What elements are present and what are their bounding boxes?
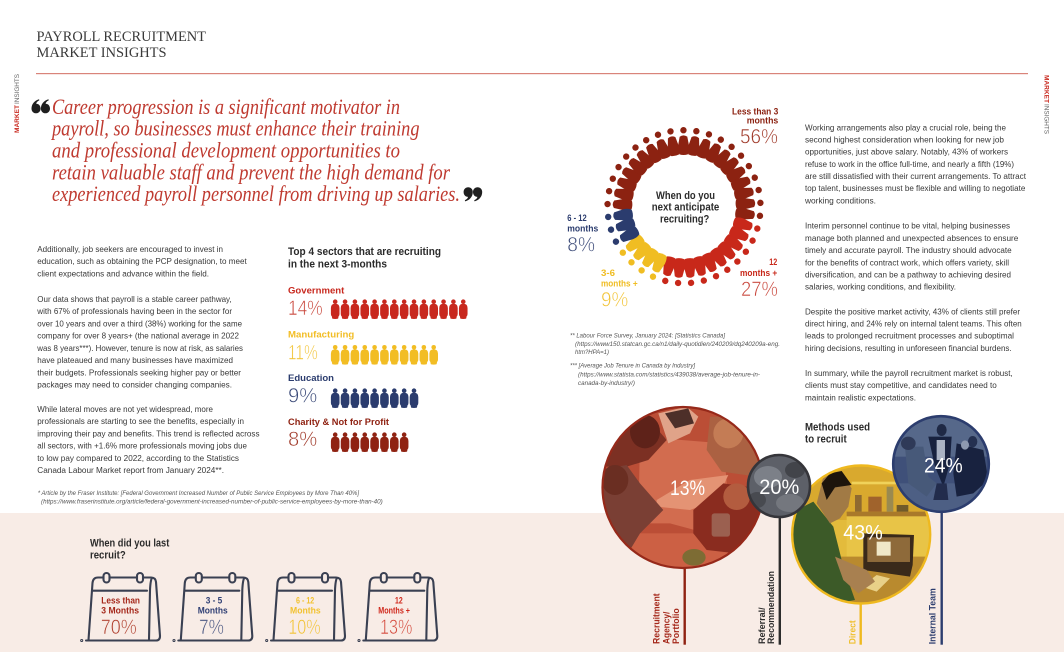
label: less than 3 months 56%: Less than 3 (732, 106, 778, 117)
footnotes: statistics sources (570, 332, 780, 387)
text block: left column: professionals are starting to see the benefits, especially in (37, 416, 244, 426)
label: 6-12 months 8%: 8% (567, 234, 595, 257)
vertical label: recruitment agency portfolio: Portfolio (671, 608, 681, 644)
pull quote: retain valuable staff and prevent the high demand for (52, 159, 450, 184)
pull quote (32, 94, 482, 206)
text block: right column: Despite the positive market activity, 43% of clients still prefer (805, 306, 1020, 316)
calendar: 3-5 months 7%: 7% (199, 616, 224, 639)
text block: right column: for the benefits of contract work, which offers variety, skill (805, 257, 1009, 267)
side label left: INSIGHTS (14, 74, 21, 104)
vertical label: referral recommendation (757, 571, 776, 644)
row: Charity and Not for Profit 8%: Charity & Not for Profit (288, 417, 390, 428)
pull quote: and professional development opportunities to (52, 137, 400, 162)
text block: left column: have plateaued and many businesses have maximized (37, 355, 233, 365)
vertical label: recruitment agency portfolio (651, 593, 681, 644)
text block: right column: direct hiring, and 24% rely on internal talent teams. This often (805, 318, 1022, 328)
calendar: less than 3 months 70%: 70% (101, 616, 137, 639)
photo circle: grey referral image (748, 454, 810, 518)
calendar: 12 months plus 13%: 13% (380, 616, 412, 639)
row: Education 9%: 9% (288, 385, 317, 408)
method: direct 43% (790, 463, 933, 645)
icon: opening quote mark (32, 99, 50, 113)
ring centre question: When do you (656, 190, 715, 202)
text block: right column: timely and accurate payroll. The industry should advocate (805, 245, 1012, 255)
label: 3-6 months plus 9%: months + (601, 279, 638, 290)
calendar: 3-5 months 7% (174, 573, 252, 641)
text block: right column (804, 122, 1027, 402)
label: 12 months plus 27%: 27% (741, 278, 778, 301)
row: Government 14%: 14% (288, 297, 323, 320)
side label left: MARKET (14, 105, 21, 133)
text block: right column: top talent, businesses must be flexible and willing to negotiate (805, 183, 1026, 193)
label: 12 months plus 27% (740, 257, 778, 301)
text block: left column: all sectors, with +1.6% more professionals moving jobs due (37, 441, 247, 451)
text block: right column: In summary, while the payroll recruitment market is robust, (805, 368, 1013, 378)
row: Manufacturing 11%: Manufacturing (288, 330, 354, 341)
footnotes: statistics sources: canada-by-industry/) (578, 380, 635, 387)
label: 6-12 months 8%: 6 - 12 (567, 213, 587, 224)
method: referral 20% (748, 454, 810, 645)
pull quote: experienced payroll personnel from driving up salaries. (52, 181, 460, 206)
label: less than 3 months 56%: 56% (740, 125, 778, 148)
ring centre question (652, 190, 719, 225)
text block: right column: working conditions. (804, 195, 876, 205)
text block: right column: Interim personnel continue to be vital, helping businesses (805, 221, 1010, 231)
calendar: 6-12 months 10%: Months (290, 606, 321, 617)
calendar: 3-5 months 7%: 3 - 5 (206, 595, 223, 606)
text block: left column: with 67% of professionals having been in the sector for (36, 306, 232, 316)
heading: top 4 sectors (288, 246, 441, 270)
method: recruitment agency 13% (600, 406, 767, 645)
heading: top 4 sectors: in the next 3-months (288, 258, 387, 270)
footnote: Fraser Institute: (https://www.fraserinstitute.org/article/federal-government-increased-number-of-public-service-employees-by-more-than-40) (41, 498, 383, 505)
label: 6-12 months 8% (567, 213, 598, 257)
text block: left column: was 8 years***). However, tenure is now at risk, as salaries (36, 343, 243, 353)
row: Manufacturing 11% (288, 330, 438, 365)
label: less than 3 months 56%: months (747, 115, 778, 126)
ring centre question: next anticipate (652, 202, 719, 214)
row: Charity and Not for Profit 8% (288, 417, 408, 452)
footnote: Fraser Institute: * Article by the Fraser Institute: [Federal Government Increased Number of Public Service Employees by More Than 40%] (38, 490, 359, 497)
heading: when did you last recruit: recruit? (90, 550, 126, 562)
text block: left column: company for over 8 years+ (the national average in 2022 (37, 331, 239, 341)
heading: methods used to recruit: to recruit (805, 434, 847, 446)
text block: left column: to low pay compared to 2022, according to the Statistics (37, 453, 239, 463)
vertical label: recruitment agency portfolio: Agency/ (662, 611, 672, 644)
ring segment: 3-6 months plus (617, 233, 668, 282)
row: Manufacturing 11%: 11% (288, 341, 318, 364)
row: Education 9%: Education (288, 373, 334, 384)
text block: right column: hiring decisions, resulting in unforeseen financial burdens. (805, 343, 1012, 353)
title: PAYROLL RECRUITMENT (36, 29, 206, 45)
label: 6-12 months 8%: months (567, 224, 598, 235)
percentage: 20% (759, 476, 799, 499)
text block: left column: Our data shows that payroll is a stable career pathway, (37, 294, 232, 304)
calendar: 6-12 months 10%: 6 - 12 (296, 595, 314, 606)
text block: right column: opportunities, just above salary. Notably, 43% of workers (805, 147, 1008, 157)
text block: left column: While lateral moves are not yet widespread, more (37, 404, 213, 414)
background panel: lower pink band (0, 513, 1064, 652)
heading: methods used to recruit (805, 422, 870, 446)
ring segment: 12 months plus (659, 216, 762, 287)
footnotes: statistics sources: (https://www.statista.com/statistics/439038/average-job-tenure-in- (578, 372, 760, 379)
side label left (14, 74, 21, 133)
calendar: less than 3 months 70%: Less than (101, 595, 140, 606)
photo circle: meeting around table (600, 406, 767, 573)
text block: left column: Additionally, job seekers are encouraged to invest in (37, 244, 223, 254)
panel: top 4 sectors pictogram chart (288, 246, 468, 452)
calendar: less than 3 months 70% (81, 573, 160, 641)
text block: left column: Canada Labour Market report from January 2024**. (37, 465, 224, 475)
photo circle: man on laptop (790, 463, 933, 607)
row: Charity and Not for Profit 8%: 8% (288, 428, 317, 451)
percentage: 24% (924, 454, 963, 477)
label: 3-6 months plus 9% (601, 268, 638, 312)
label: 3-6 months plus 9%: 9% (601, 289, 628, 312)
calendar: 3-5 months 7%: Months (198, 606, 228, 617)
heading: when did you last recruit: When did you last (90, 538, 170, 550)
text block: right column: refuse to work in the office full-time, and nearly a fifth (19%) (805, 159, 1014, 169)
calendar: 12 months plus 13% (358, 573, 437, 641)
text block: right column: salaries, working conditions, and flexibility. (805, 282, 956, 292)
calendar: 6-12 months 10% (266, 573, 345, 641)
calendar: 6-12 months 10%: 10% (288, 616, 321, 639)
percentage: 13% (670, 477, 705, 500)
vertical label: recruitment agency portfolio: Recruitment (651, 593, 661, 644)
text block: left column (36, 244, 260, 475)
panel: when did you last recruit calendars (81, 538, 437, 641)
label: less than 3 months 56% (732, 106, 778, 148)
text block: left column: client expectations and advance within the field. (37, 268, 209, 278)
calendar: 12 months plus 13%: Months + (378, 606, 410, 617)
text block: left column: over 10 years and over a third (38%) working for the same (37, 318, 242, 328)
ring segment: 6-12 months (604, 208, 641, 248)
vertical label: direct: Direct (848, 620, 858, 644)
heading: top 4 sectors: Top 4 sectors that are recruiting (288, 246, 441, 258)
percentage: 43% (843, 521, 883, 544)
label: 3-6 months plus 9%: 3-6 (601, 268, 615, 279)
footnote: Fraser Institute (38, 490, 383, 505)
title (36, 29, 206, 61)
footnotes: statistics sources: htm?HPA=1) (575, 349, 609, 356)
text block: left column: their budgets. Professionals seeking higher pay or better (37, 367, 241, 377)
photo circle: team standing meeting (893, 416, 990, 513)
label: 12 months plus 27%: 12 (769, 257, 777, 268)
side label right (1042, 75, 1050, 134)
calendar: 12 months plus 13%: 12 (395, 595, 403, 606)
row: Government 14% (288, 285, 468, 320)
text block: right column: leads to prolonged recruitment processes and suboptimal (805, 331, 1014, 341)
text block: right column: second highest consideration when looking for new job (805, 134, 1004, 144)
heading: methods used to recruit: Methods used (805, 422, 870, 434)
text block: left column: education, such as obtaining the PCP designation, to meet (37, 256, 247, 266)
chart: when do you next anticipate recruiting, ring of people (567, 106, 778, 312)
ring segment: less than 3 months (604, 127, 764, 222)
footnotes: statistics sources: (https://www150.statcan.gc.ca/n1/daily-quotidien/240209/dq240209a-eng. (575, 341, 780, 348)
icon: closing quote mark (464, 187, 482, 201)
ring centre question: recruiting? (660, 213, 710, 225)
method: internal team 24% (893, 416, 990, 645)
text block: right column: clients must stay competitive, and candidates need to (805, 380, 997, 390)
footnotes: statistics sources: ** Labour Force Survey, January 2024: [Statistics Canada] (570, 332, 725, 339)
vertical label: referral recommendation: Referral/ (757, 607, 767, 644)
text block: right column: maintain realistic expectations. (805, 392, 916, 402)
text block: right column: Working arrangements also play a crucial role, being the (805, 122, 1006, 132)
row: Education 9% (288, 373, 418, 408)
footnotes: statistics sources: *** [Average Job Tenure in Canada by Industry] (570, 362, 695, 369)
calendar: less than 3 months 70%: 3 Months (101, 606, 139, 617)
text block: right column: are still dissatisfied with their current arrangements. To attract (805, 171, 1027, 181)
side label right: MARKET (1042, 75, 1050, 103)
text block: right column: manage both planned and unexpected absences to ensure (805, 233, 1019, 243)
text block: left column: packages may need to consider changing companies. (37, 380, 232, 390)
row: Government 14%: Government (288, 285, 345, 296)
vertical label: internal team: Internal Team (927, 588, 937, 644)
label: 12 months plus 27%: months + (740, 268, 778, 279)
vertical label: referral recommendation: Recommendation (766, 571, 776, 644)
pull quote: payroll, so businesses must enhance their training (50, 116, 419, 140)
side label right: INSIGHTS (1042, 104, 1050, 134)
text block: right column: diversification, and can be a pathway to achieving desired (805, 270, 1011, 280)
title: MARKET INSIGHTS (36, 45, 166, 61)
heading: when did you last recruit (90, 538, 170, 562)
pull quote: Career progression is a significant motivator in (52, 94, 400, 119)
text block: left column: improving their pay and benefits. This trend is reflected across (37, 428, 259, 438)
